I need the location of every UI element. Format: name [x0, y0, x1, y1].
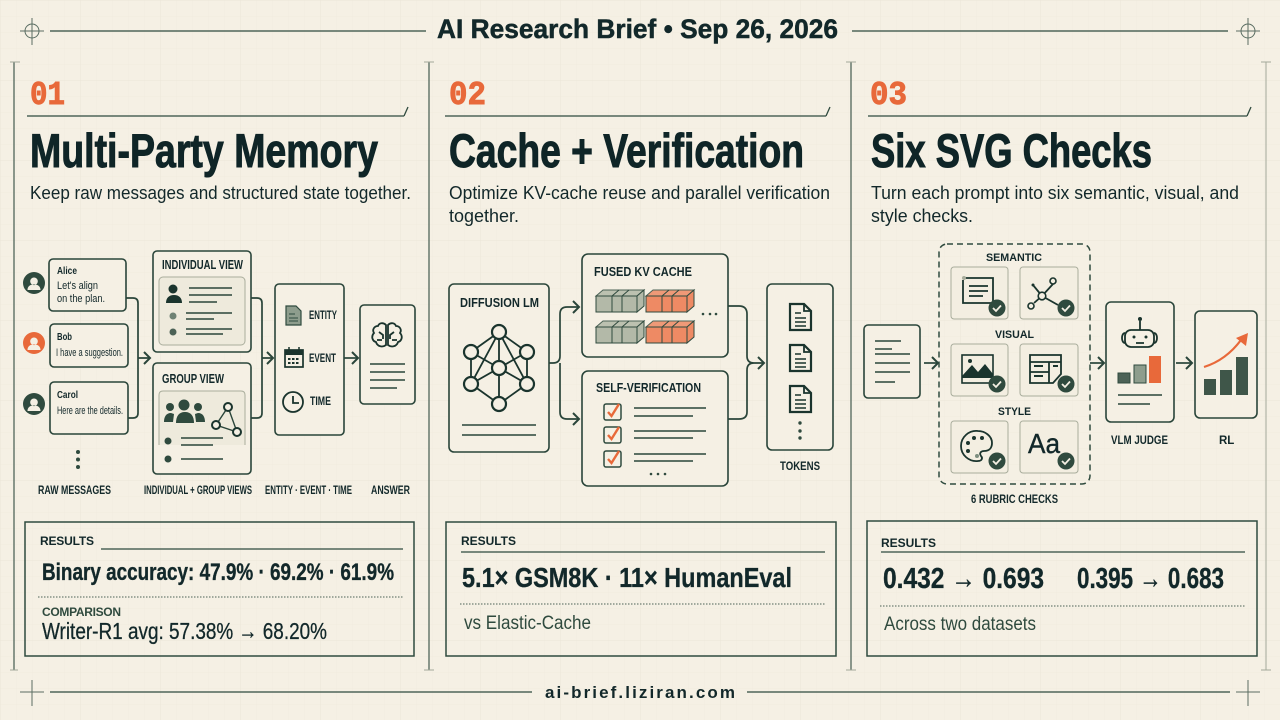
- message: Alice: Let's align: [57, 280, 98, 292]
- icon: left crosshair: [20, 18, 44, 45]
- group view card: [153, 363, 251, 474]
- self-verification card: SELF-VERIFICATION: [596, 380, 701, 395]
- check: typography: [1020, 421, 1078, 473]
- subtitle: together.: [449, 206, 519, 226]
- more messages dots: [76, 450, 80, 469]
- arrow: checks to judge: [1090, 357, 1104, 369]
- check: image: [951, 344, 1008, 396]
- results box: Binary accuracy: 47.9% · 69.2% · 61.9%: [42, 559, 394, 586]
- results box: COMPARISON: [42, 605, 121, 619]
- icon: footer right cross: [1236, 680, 1260, 706]
- results box: 0.432 → 0.693: [883, 563, 1044, 595]
- rl label: RL: [1219, 435, 1234, 447]
- section number 03: 03: [870, 77, 907, 114]
- entity event time card: TIME: [310, 396, 331, 408]
- vlm label: VLM JUDGE: [1111, 435, 1168, 447]
- panel: six svg checks: [864, 77, 1257, 656]
- subtitle: style checks.: [871, 206, 973, 226]
- arrow: views to structured state: [251, 298, 273, 418]
- tokens label: TOKENS: [780, 459, 820, 473]
- message: Carol: Here are the details.: [57, 405, 123, 417]
- subtitle: [871, 183, 1239, 226]
- icon: right crosshair: [1236, 18, 1260, 45]
- results box: RESULTS: [881, 536, 936, 550]
- arrows: branches to tokens: [728, 306, 764, 419]
- results box: RESULTS: [40, 534, 94, 548]
- arrow: state to answer: [344, 352, 358, 364]
- arrow: messages to views: [126, 298, 150, 418]
- icon: brain: [372, 323, 402, 346]
- message: Bob: [23, 324, 128, 367]
- bars: [1118, 356, 1161, 383]
- arrows: diffusion to branches: [549, 301, 579, 425]
- message: Bob: Bob: [57, 331, 72, 343]
- check: palette: [951, 421, 1008, 473]
- entity event time card: EVENT: [309, 353, 336, 365]
- message: Bob: I have a suggestion.: [56, 347, 123, 359]
- subtitle: Keep raw messages and structured state together.: [30, 183, 411, 203]
- icon: robot: [1122, 317, 1157, 347]
- message: Carol: [23, 382, 128, 434]
- diffusion lm card: [449, 284, 549, 452]
- cache blocks: [596, 290, 694, 343]
- check: layout: [1020, 344, 1078, 396]
- arrow: prompt to checks: [924, 357, 938, 369]
- title: AI Research Brief • Sep 26, 2026: [437, 14, 838, 44]
- message: Alice: on the plan.: [57, 293, 105, 305]
- pipeline labels: INDIVIDUAL + GROUP VIEWS: [144, 485, 252, 497]
- results box: Across two datasets: [884, 614, 1036, 635]
- pipeline labels: [38, 483, 410, 497]
- individual view card: INDIVIDUAL VIEW: [162, 258, 243, 272]
- checklist: [604, 404, 706, 467]
- icon: entity document: [286, 306, 301, 325]
- results box: Writer-R1 avg: 57.38% → 68.20%: [42, 618, 327, 644]
- rubric checks group: [939, 244, 1090, 484]
- panel: cache and verification: [445, 77, 836, 656]
- results box: [867, 521, 1257, 656]
- subtitle: Optimize KV-cache reuse and parallel verification: [449, 183, 830, 203]
- subtitle: [449, 183, 830, 226]
- results box: vs Elastic-Cache: [464, 613, 591, 634]
- fused kv cache card: [582, 254, 728, 357]
- icon: footer left cross: [20, 680, 44, 706]
- subtitle: Turn each prompt into six semantic, visual, and: [871, 183, 1239, 203]
- check: typography: Aa: [1028, 428, 1060, 459]
- heading: Multi-Party Memory: [30, 124, 378, 177]
- message: Carol: Carol: [57, 389, 78, 401]
- footer: [20, 680, 1260, 706]
- results box: 5.1× GSM8K · 11× HumanEval: [462, 562, 792, 593]
- icon: time clock: [283, 392, 303, 412]
- group view card: GROUP VIEW: [162, 372, 224, 386]
- section number 02: 02: [449, 77, 486, 114]
- answer card: [360, 305, 415, 404]
- rl card: [1195, 311, 1257, 418]
- rubric checks group: STYLE: [998, 406, 1031, 418]
- rubric checks group: SEMANTIC: [986, 252, 1042, 264]
- results box: [446, 522, 836, 656]
- results box: 0.395 → 0.683: [1077, 563, 1224, 595]
- tokens card: [767, 284, 833, 450]
- results box: [25, 522, 414, 656]
- pipeline labels: RAW MESSAGES: [38, 483, 111, 497]
- pipeline labels: ENTITY · EVENT · TIME: [265, 485, 352, 497]
- message: Alice: Alice: [57, 265, 77, 277]
- fused kv cache card: FUSED KV CACHE: [594, 264, 692, 279]
- diffusion lm card: DIFFUSION LM: [460, 295, 539, 310]
- prompt document card: [864, 325, 920, 398]
- footer url: ai-brief.liziran.com: [545, 683, 735, 702]
- pipeline labels: ANSWER: [371, 483, 410, 497]
- check: network: [1020, 267, 1078, 319]
- icon: neural network: [464, 325, 534, 411]
- arrow: judge to rl: [1176, 357, 1192, 369]
- entity event time card: ENTITY: [309, 310, 337, 322]
- vlm judge card: [1106, 302, 1174, 422]
- header: [20, 14, 1260, 45]
- section number 01: 01: [30, 77, 65, 114]
- icon: token documents: [790, 304, 811, 412]
- rubric label: 6 RUBRIC CHECKS: [971, 494, 1058, 506]
- self-verification card: [582, 371, 728, 486]
- individual view card: [153, 251, 251, 352]
- results box: RESULTS: [461, 534, 516, 548]
- check: document: [951, 267, 1008, 319]
- heading: Six SVG Checks: [871, 124, 1152, 177]
- icon: event calendar: [285, 347, 303, 367]
- heading: Cache + Verification: [449, 124, 804, 177]
- message: Alice: [23, 259, 126, 311]
- entity event time card: [275, 284, 344, 435]
- panel: multi-party memory: [23, 77, 415, 656]
- rubric checks group: VISUAL: [995, 329, 1034, 341]
